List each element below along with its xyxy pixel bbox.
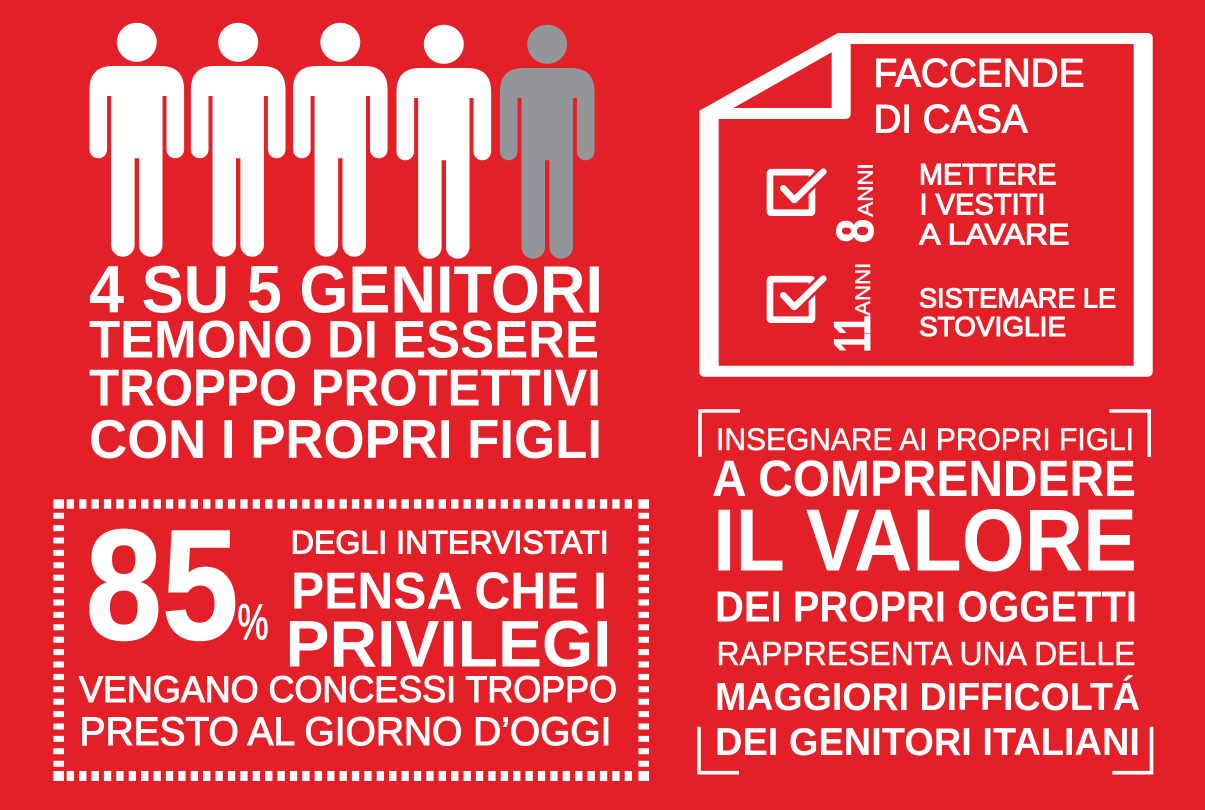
icon: checkbox 1	[770, 172, 823, 213]
text: temono di essere: TEMONO DI ESSERE	[89, 311, 599, 370]
text: pensa che i: PENSA CHE I	[291, 563, 607, 621]
text: privilegi: PRIVILEGI	[286, 607, 612, 681]
text: presto al giorno d'oggi: PRESTO AL GIORNO D’OGGI	[80, 710, 612, 754]
percent sign: %	[238, 594, 268, 650]
text: dei genitori italiani: DEI GENITORI ITALIANI	[715, 721, 1140, 764]
text: mettere i vestiti a lavare: A LAVARE	[919, 219, 1069, 252]
text: con i propri figli: CON I PROPRI FIGLI	[89, 408, 602, 470]
panel: 85 percent privileges, dotted frame	[53, 498, 649, 781]
panel: faccende di casa, document	[699, 33, 1153, 377]
icon: person 2	[191, 23, 286, 257]
dotted frame	[53, 499, 649, 781]
age label: 8 anni	[827, 163, 885, 243]
icon: person 5 grey	[500, 25, 594, 259]
icon: person 1	[90, 23, 184, 257]
icon: person 3	[293, 23, 388, 257]
text: degli intervistati: DEGLI INTERVISTATI	[291, 524, 609, 560]
text: mettere i vestiti a lavare: METTERE	[919, 159, 1056, 192]
age label: 11 anni	[824, 263, 882, 352]
text: dei propri oggetti: DEI PROPRI OGGETTI	[715, 584, 1137, 632]
panel: 4 su 5 genitori	[89, 23, 603, 470]
text: mettere i vestiti a lavare	[919, 159, 1069, 252]
icon: person 4	[396, 25, 491, 259]
age label: 8 anni: ANNI	[855, 163, 878, 217]
heading: 4 su 5 genitori: 4 SU 5 GENITORI	[89, 253, 603, 328]
text: maggiori difficoltà: MAGGIORI DIFFICOLTÁ	[715, 675, 1140, 719]
heading: di casa: DI CASA	[874, 98, 1028, 142]
panel: il valore dei propri oggetti	[699, 411, 1152, 773]
age label: 11 anni: 11	[824, 316, 882, 352]
text: sistemare le stoviglie: STOVIGLIE	[919, 311, 1066, 342]
icon: row of five people, four white and one grey	[90, 23, 594, 259]
text: a comprendere: A COMPRENDERE	[712, 450, 1136, 507]
text: mettere i vestiti a lavare: I VESTITI	[920, 189, 1046, 222]
icon: document outline with folded corner	[699, 33, 1153, 377]
text: sistemare le stoviglie	[919, 282, 1116, 342]
text: rappresenta una delle: RAPPRESENTA UNA DELLE	[716, 635, 1136, 672]
text: il valore: IL VALORE	[713, 491, 1137, 590]
age label: 8 anni: 8	[827, 219, 885, 243]
icon: checkbox 2	[770, 279, 823, 320]
corner brackets	[699, 411, 1152, 773]
text: sistemare le stoviglie: SISTEMARE LE	[919, 282, 1116, 313]
heading: faccende: FACCENDE	[874, 52, 1084, 96]
age label: 11 anni: ANNI	[852, 263, 875, 316]
text: vengano concessi troppo: VENGANO CONCESSI TROPPO	[79, 669, 617, 710]
text: troppo protettivi: TROPPO PROTETTIVI	[89, 359, 601, 417]
big number 85: 85	[86, 498, 238, 673]
text: insegnare ai propri figli: INSEGNARE AI PROPRI FIGLI	[716, 421, 1134, 457]
